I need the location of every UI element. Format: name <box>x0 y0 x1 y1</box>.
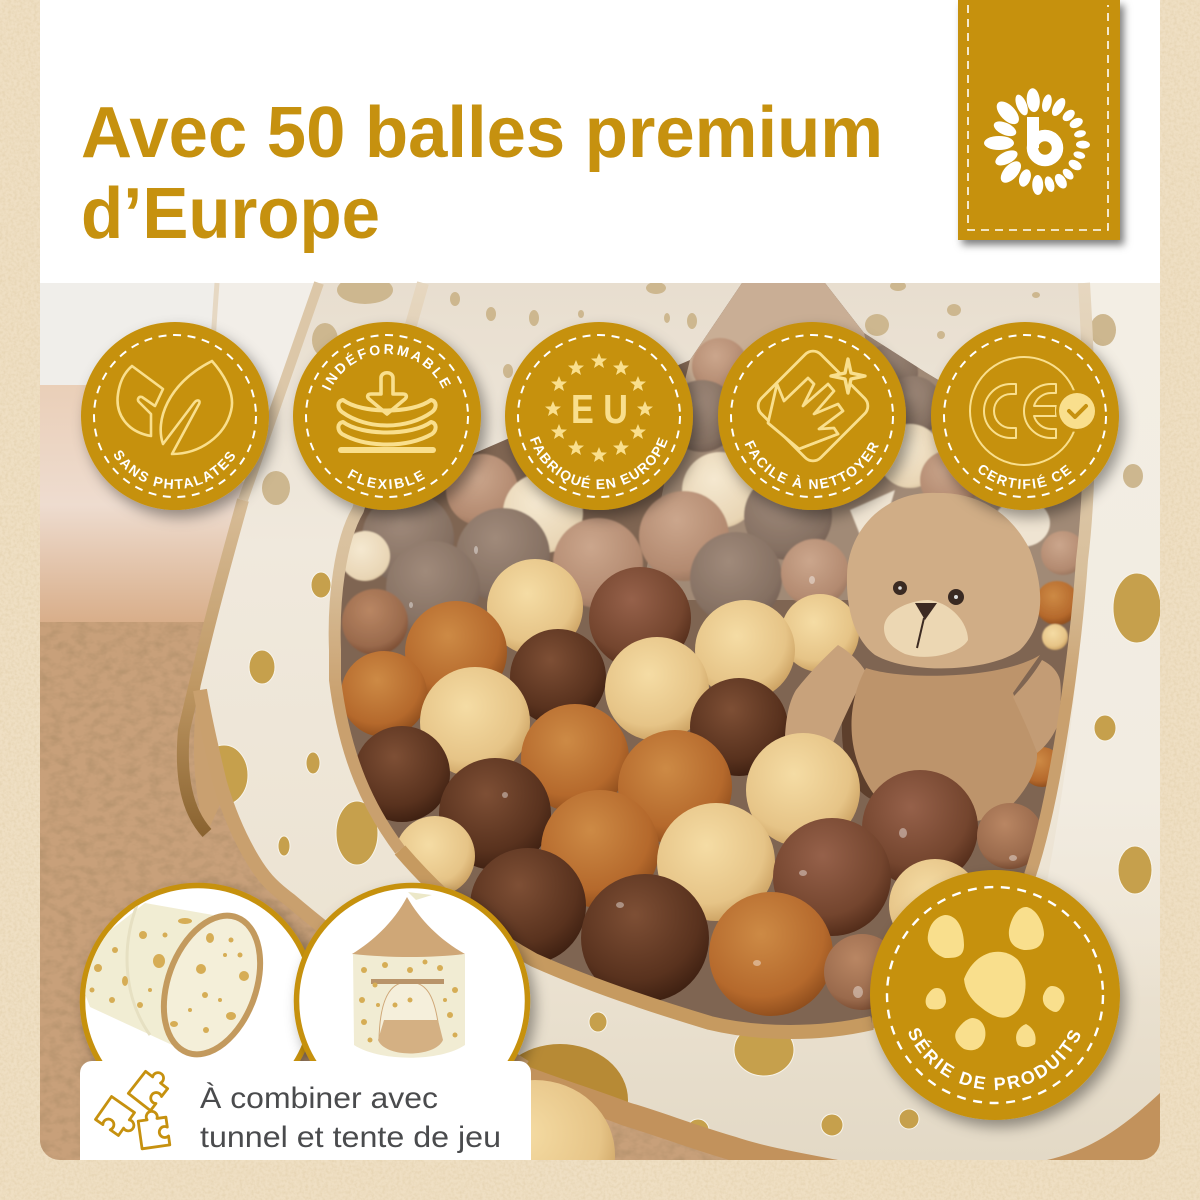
photo: side wall of the tent <box>242 385 278 482</box>
badge: indeformable flexible <box>290 320 494 524</box>
inset: play tent product <box>290 881 544 1066</box>
badge: indeformable flexible: FLEXIBLE <box>348 469 425 490</box>
icon: polka blobs <box>926 907 1064 1050</box>
badge: facile a nettoyer: FACILE À NETTOYER <box>744 440 879 490</box>
badge: serie de produits <box>868 870 1134 1136</box>
cream ball in front of tent <box>531 1080 615 1160</box>
icon: puzzle pieces <box>96 1065 172 1149</box>
icon: CE mark with check <box>970 357 1098 465</box>
callout text <box>200 1082 501 1154</box>
photo: room background <box>40 283 729 1160</box>
logo ribbon <box>958 0 1120 240</box>
icon: EU stars <box>545 353 653 462</box>
photo: window with plastic balls <box>330 283 1100 1043</box>
photo: back flap of the tent <box>194 710 220 826</box>
inset: tunnel product <box>76 882 310 1061</box>
callout text: tunnel et tente de jeu <box>200 1121 501 1154</box>
icon: leaves <box>118 361 232 454</box>
photo: tent fabric <box>200 283 1160 1160</box>
teddy bear <box>785 493 1061 823</box>
icon: EU stars: E U <box>571 386 628 432</box>
front balls <box>618 730 732 844</box>
badge: fabrique en europe: FABRIQUÉ EN EUROPE <box>530 436 668 490</box>
rear hazy balls <box>340 338 1085 655</box>
photo: tent trim <box>183 283 1160 1172</box>
callout text: À combiner avec <box>200 1082 438 1115</box>
badge: indeformable flexible: INDÉFORMABLE <box>322 344 451 391</box>
badge: sans phtalates <box>78 320 282 526</box>
badge: certifie CE: CERTIFIÉ CE <box>978 464 1072 490</box>
badge: fabrique en europe <box>502 320 705 525</box>
middle balls <box>487 559 583 655</box>
badge: facile a nettoyer <box>716 321 920 524</box>
icon: sunflower b logo <box>984 88 1090 195</box>
icon: cushion under pressure <box>338 373 436 450</box>
icon: hand wiping cloth <box>754 347 872 465</box>
title <box>81 93 883 254</box>
badge: sans phtalates: SANS PHTALATES <box>114 450 235 489</box>
ball highlights <box>409 546 1017 998</box>
badge: serie de produits: SÉRIE DE PRODUITS <box>908 1028 1080 1090</box>
title: d’Europe <box>81 174 380 254</box>
badge: certifie CE <box>928 320 1133 526</box>
white header band <box>40 0 1160 283</box>
callout: combine with tunnel and tent <box>80 1061 531 1160</box>
title: Avec 50 balles premium <box>81 93 883 173</box>
photo: fabric polka dots <box>200 276 1161 1156</box>
